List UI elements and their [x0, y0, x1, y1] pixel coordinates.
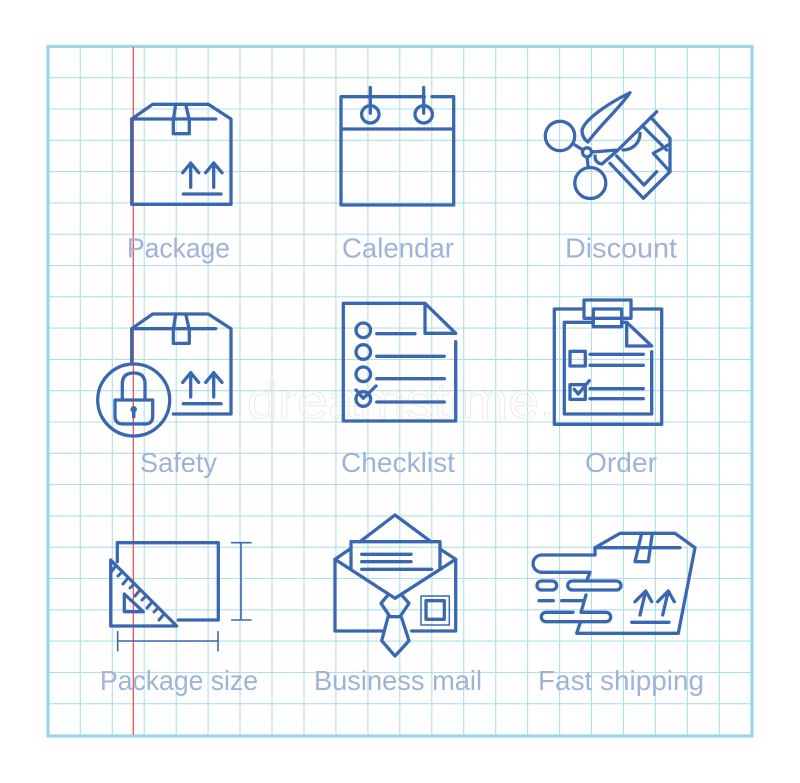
page frame: [48, 46, 752, 736]
panel: package size: [100, 543, 258, 696]
icon: clipboard order: [554, 300, 662, 424]
icon: scissors and price tag: [545, 93, 670, 198]
watermark: dreamstime.: [247, 373, 555, 429]
panel: fast shipping: [533, 533, 704, 696]
panel: checklist: [341, 303, 456, 478]
panel: business mail: [314, 515, 482, 696]
label: discount: Discount: [565, 232, 677, 264]
panel: calendar: [341, 88, 454, 264]
icon: package with padlock: [98, 314, 231, 436]
red margin line: [132, 47, 134, 735]
label: package: Package: [127, 232, 230, 264]
icon: calendar: [341, 88, 454, 205]
icon: package box: [132, 104, 231, 204]
icon: envelope with tie: [335, 515, 456, 656]
label: checklist: Checklist: [341, 447, 455, 478]
panel: package: [127, 104, 231, 264]
panel: discount: [545, 93, 677, 264]
label: business mail: Business mail: [314, 665, 482, 696]
label: safety: Safety: [140, 447, 217, 478]
label: fast shipping: Fast shipping: [538, 665, 704, 696]
icon: package size with set square: [111, 543, 251, 651]
label: calendar: Calendar: [342, 232, 454, 264]
label: package size: Package size: [100, 665, 258, 696]
label: order: Order: [585, 447, 657, 478]
panel: order: [554, 300, 662, 478]
icon: checklist document: [343, 303, 456, 421]
panel: safety: [98, 314, 231, 478]
icon: fast moving package: [533, 533, 695, 633]
